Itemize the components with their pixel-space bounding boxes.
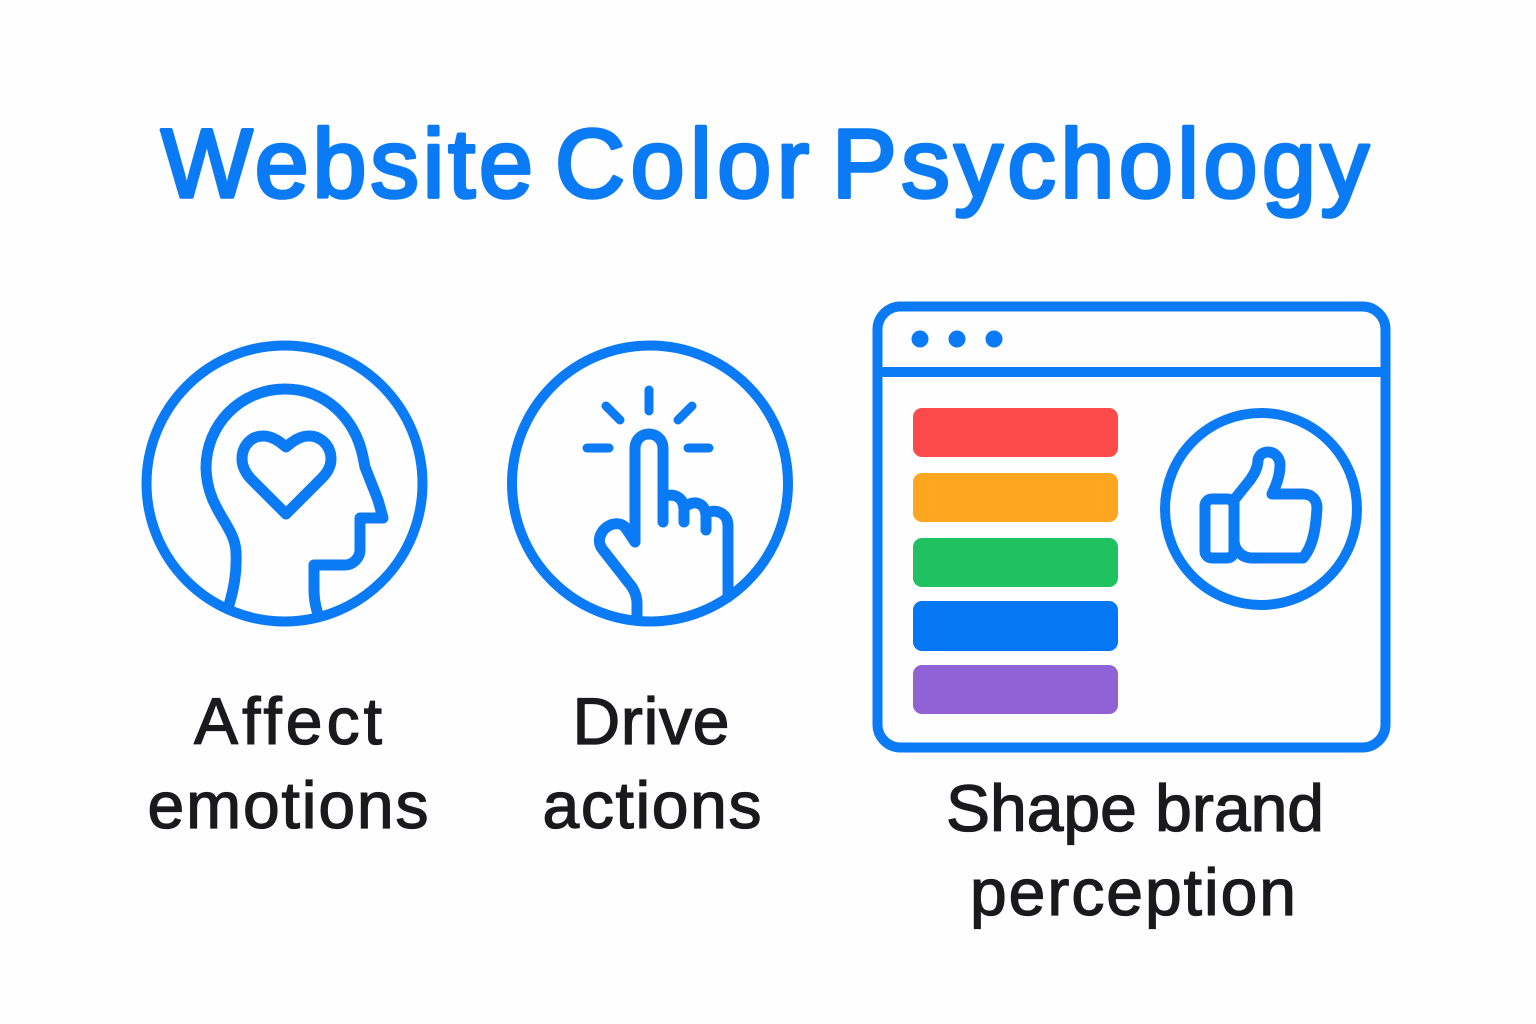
label: affect emotions: Affect <box>194 684 382 758</box>
label: shape brand perception: Shape brand <box>946 771 1324 845</box>
purple bar <box>913 665 1118 714</box>
icon: thumbs up <box>1165 413 1357 605</box>
label: shape brand perception <box>946 771 1324 929</box>
label: affect emotions: emotions <box>148 768 428 842</box>
icon: browser window <box>878 306 1386 748</box>
blue bar <box>913 601 1118 651</box>
red bar <box>913 408 1118 457</box>
label: drive actions: actions <box>542 768 762 842</box>
icon: head with heart <box>146 346 422 622</box>
title: Psychology <box>832 109 1370 218</box>
icon: pointing hand <box>512 346 788 622</box>
orange bar <box>913 473 1118 522</box>
label: affect emotions <box>148 684 428 842</box>
label: shape brand perception: perception <box>970 855 1296 929</box>
title: Color <box>555 109 809 218</box>
label: drive actions <box>542 684 762 842</box>
green bar <box>913 538 1118 587</box>
label: drive actions: Drive <box>572 684 730 758</box>
title <box>161 109 1370 218</box>
title: Website <box>161 109 533 218</box>
